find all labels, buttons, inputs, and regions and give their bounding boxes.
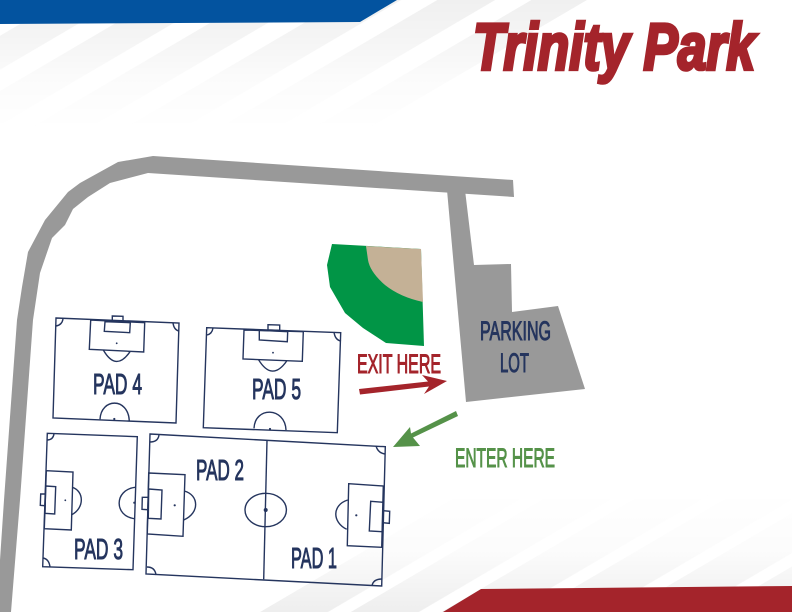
- pad 4 label: PAD 4: [93, 369, 142, 401]
- pad 5 field: [203, 325, 341, 433]
- pad 3 field: [40, 433, 137, 570]
- parking lot: [447, 190, 585, 402]
- centre arc: [119, 487, 135, 519]
- parking lot surface: [447, 190, 585, 402]
- pad 2 penalty area: [147, 473, 185, 536]
- pad 2 label: PAD 2: [196, 455, 244, 487]
- exit arrow: [359, 375, 447, 394]
- boundary: [203, 328, 341, 433]
- penalty area: [89, 320, 145, 352]
- boundary: [43, 433, 137, 570]
- penalty area: [44, 471, 73, 530]
- boundary: [53, 318, 179, 423]
- halfway line and centre circle: [264, 440, 267, 579]
- boundary: [146, 434, 385, 586]
- parking lot label line two: LOT: [500, 348, 529, 378]
- baseball field: [327, 244, 424, 346]
- enter arrow: [393, 411, 458, 447]
- infield dirt: [366, 246, 423, 302]
- outfield grass: [327, 244, 424, 346]
- pad 1 penalty area: [347, 484, 383, 547]
- pad 3 label: PAD 3: [74, 534, 123, 566]
- bottom red banner: [443, 586, 792, 612]
- top blue banner: [0, 0, 397, 24]
- enter label: ENTER HERE: [455, 443, 555, 473]
- pad 1 label: PAD 1: [291, 543, 337, 575]
- centre arc: [254, 412, 286, 430]
- road: [0, 156, 514, 612]
- exit label: EXIT HERE: [357, 349, 441, 379]
- pad 5 label: PAD 5: [252, 374, 301, 406]
- penalty area: [243, 330, 303, 361]
- centre arc: [100, 403, 129, 421]
- parking lot label: PARKING: [480, 316, 551, 346]
- pads 1 and 2 field: [142, 434, 390, 586]
- pad 4 field: [53, 316, 179, 423]
